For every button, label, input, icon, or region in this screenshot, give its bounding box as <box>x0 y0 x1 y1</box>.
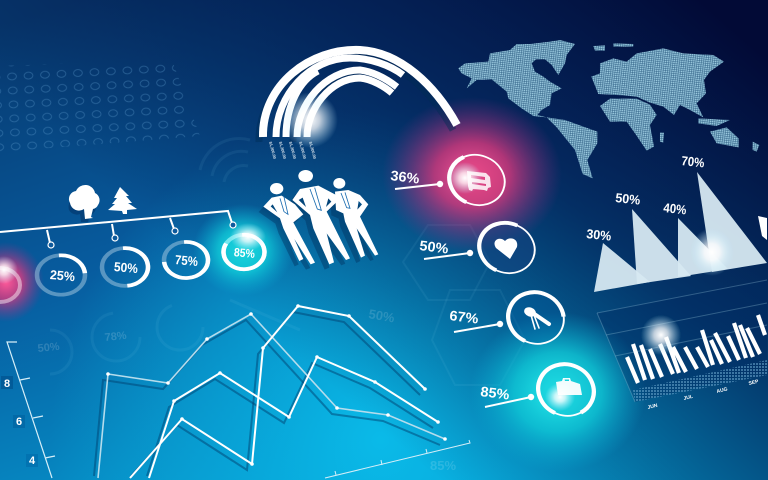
Australia and islands <box>593 43 759 152</box>
South America <box>547 117 597 178</box>
y axis <box>7 342 55 478</box>
ring: pink partial <box>0 268 20 302</box>
triangle 50% <box>632 209 691 284</box>
icon: deciduous tree <box>69 185 100 219</box>
bar chart panel <box>597 280 767 411</box>
y axis labels <box>1 376 38 467</box>
stat 36%: 36% <box>390 167 421 187</box>
arc chart <box>259 50 457 160</box>
arc labels: $1,200.00 <box>308 141 318 160</box>
stat 36% <box>390 144 515 216</box>
glow: cyan behind briefcase ring <box>470 312 646 472</box>
arc 4 <box>297 70 397 137</box>
ring: 25%: 25% <box>49 267 76 284</box>
month labels: SEP <box>748 379 760 387</box>
stat 50% <box>419 212 545 284</box>
tree connector line <box>0 211 236 248</box>
glow: arc chart light <box>282 92 338 148</box>
Eurasia <box>591 48 724 117</box>
stat 85% <box>480 354 604 426</box>
icon: truck <box>467 171 491 191</box>
arc labels <box>268 141 318 160</box>
line B <box>130 306 425 478</box>
ring: 75%: 75% <box>174 252 199 269</box>
triangle 70% <box>697 172 767 272</box>
month labels: JUN <box>647 403 659 411</box>
faint background ghost shapes: 50% <box>37 341 60 355</box>
arc labels: $1,200.00 <box>268 141 278 160</box>
triangle 30% <box>594 243 650 292</box>
stat 50%: 50% <box>419 237 450 257</box>
y axis labels: 6 <box>16 416 22 428</box>
Africa <box>600 99 657 151</box>
arc 1 <box>263 50 457 137</box>
ring: 50% <box>100 247 150 287</box>
ring: 25% <box>35 254 87 296</box>
ring: 50%: 50% <box>113 259 139 276</box>
triangle chart <box>586 153 767 292</box>
arc 3 <box>286 71 318 137</box>
bars <box>627 315 765 383</box>
glow: bar chart light <box>641 315 681 355</box>
dotted band <box>633 360 767 402</box>
glow: pink left edge <box>0 242 44 322</box>
glow: pink ring highlight <box>0 256 18 284</box>
icon: keys <box>523 306 549 329</box>
arc labels: $1,200.00 <box>298 141 308 160</box>
triangle chart: 50% <box>615 190 642 208</box>
x axis <box>325 440 470 478</box>
line shadows <box>94 312 440 476</box>
data points <box>106 304 447 466</box>
stat 67% <box>449 282 574 354</box>
world map <box>458 40 759 178</box>
line A <box>98 314 445 478</box>
month labels: AUG <box>716 386 728 395</box>
tree icons <box>69 185 137 222</box>
line chart <box>7 304 470 478</box>
triangle chart: 70% <box>681 153 706 170</box>
arc labels: $1,200.00 <box>278 141 288 160</box>
triangle chart: 30% <box>586 226 613 244</box>
triangle chart: 40% <box>663 200 688 217</box>
faint background ghost shapes: 85% <box>430 458 456 473</box>
glow: triangle chart light <box>690 228 734 276</box>
icon: briefcase <box>556 378 582 395</box>
arc labels: $1,200.00 <box>288 141 298 160</box>
arc 5 <box>307 78 392 137</box>
arc 2 <box>276 58 403 137</box>
ring: 75% <box>162 240 210 280</box>
y axis labels: 4 <box>29 455 36 467</box>
North America <box>458 40 575 117</box>
people icon <box>259 170 378 270</box>
glow: cyan ring highlight <box>230 223 266 251</box>
glow: pink behind 36% ring <box>382 97 562 253</box>
stat 85%: 85% <box>480 383 511 403</box>
ring: 85%: 85% <box>233 245 256 261</box>
month labels <box>647 379 760 411</box>
glow: cyan behind 85% ring <box>193 204 293 296</box>
month labels: JUL <box>683 394 694 402</box>
icon: pine tree <box>108 187 137 214</box>
line C <box>149 357 438 478</box>
icon: heart <box>495 238 517 259</box>
faint background ghost shapes: 50% <box>367 306 396 326</box>
triangle 40% <box>678 218 728 277</box>
faint background ghost shapes <box>37 138 525 473</box>
faint background ghost shapes: 78% <box>104 330 127 344</box>
stat 67%: 67% <box>449 307 480 327</box>
ring: 85% <box>222 233 266 271</box>
right-edge building icon <box>758 216 767 240</box>
y axis labels: 8 <box>4 378 10 390</box>
